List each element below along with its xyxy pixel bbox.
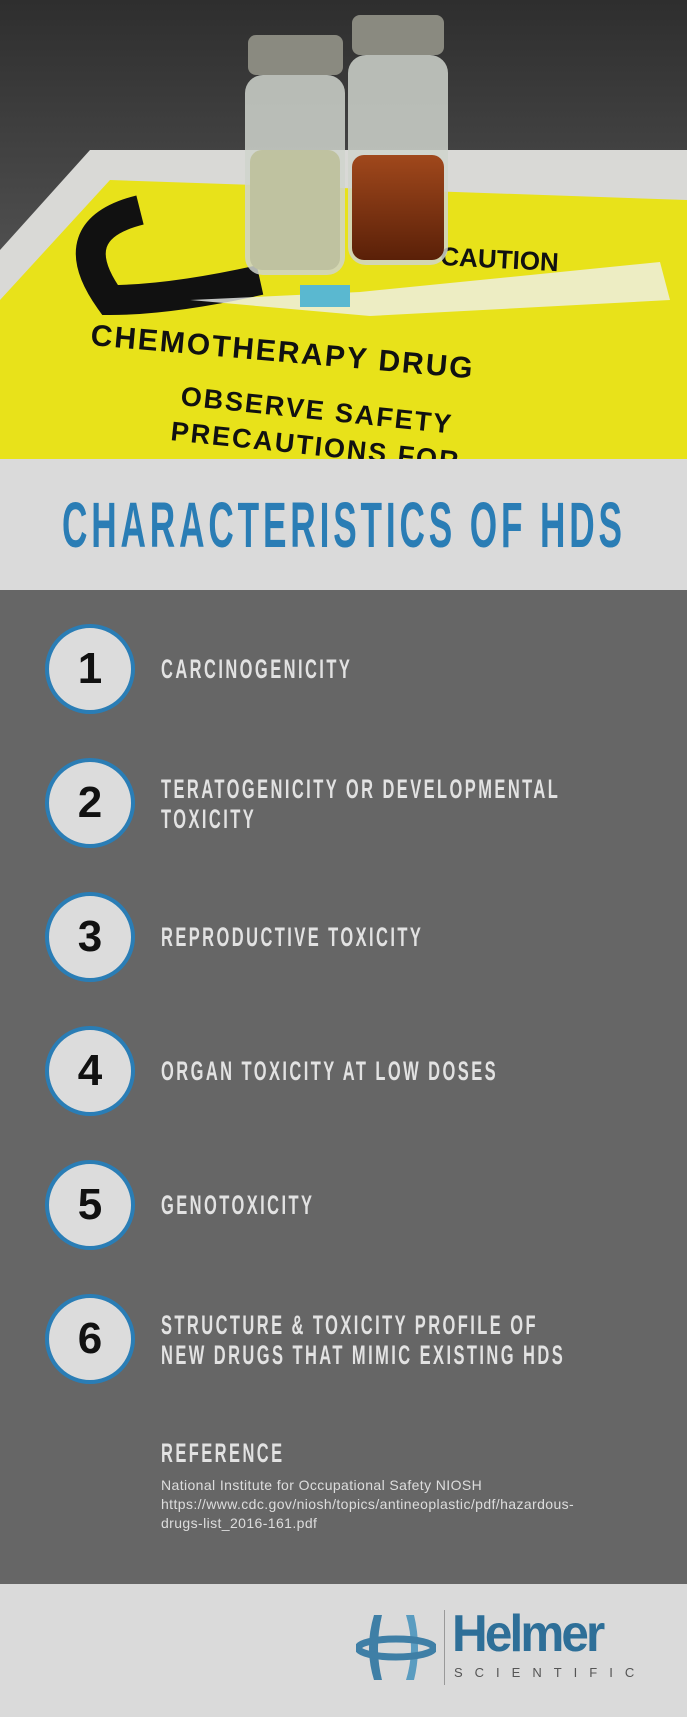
item 3: 3 <box>78 912 102 961</box>
reference block <box>161 1438 574 1531</box>
item 3: REPRODUCTIVE TOXICITY <box>161 922 423 952</box>
logo: Helmer Scientific: Helmer <box>452 1605 602 1663</box>
item 2: TOXICITY <box>161 804 256 834</box>
item 4 <box>45 1026 498 1116</box>
item 4: ORGAN TOXICITY AT LOW DOSES <box>161 1056 498 1086</box>
photo: chemotherapy vials: CAUTION <box>440 241 560 277</box>
item 2: 2 <box>78 778 102 827</box>
item 4: 4 <box>78 1046 102 1095</box>
item 6: 6 <box>78 1314 102 1363</box>
photo: chemotherapy vials: CHEMOTHERAPY DRUG <box>89 319 476 386</box>
item 5 <box>45 1160 314 1250</box>
reference block: drugs-list_2016-161.pdf <box>161 1515 317 1531</box>
item 1: 1 <box>78 644 102 693</box>
reference block: https://www.cdc.gov/niosh/topics/antineoplastic/pdf/hazardous- <box>161 1496 574 1512</box>
reference block: REFERENCE <box>161 1438 285 1468</box>
item 6 <box>45 1294 565 1384</box>
item 5: GENOTOXICITY <box>161 1190 314 1220</box>
logo: Helmer Scientific <box>356 1605 646 1685</box>
logo: Helmer Scientific: SCIENTIFIC <box>454 1665 646 1680</box>
item 2 <box>45 758 560 848</box>
reference block: National Institute for Occupational Safety NIOSH <box>161 1477 482 1493</box>
item 1: CARCINOGENICITY <box>161 654 352 684</box>
title band <box>0 459 687 590</box>
vial left <box>248 35 343 75</box>
photo: chemotherapy vials <box>0 0 687 459</box>
syringe <box>190 262 670 316</box>
item 3 <box>45 892 423 982</box>
footer <box>0 1584 687 1717</box>
title: CHARACTERISTICS OF HDS <box>62 489 626 561</box>
item 6: STRUCTURE & TOXICITY PROFILE OF <box>161 1310 538 1340</box>
item 1 <box>45 624 352 714</box>
item 5: 5 <box>78 1180 102 1229</box>
item 6: NEW DRUGS THAT MIMIC EXISTING HDS <box>161 1340 565 1370</box>
vial right <box>352 15 444 55</box>
item 2: TERATOGENICITY OR DEVELOPMENTAL <box>161 774 560 804</box>
photo: chemotherapy vials: OBSERVE SAFETY <box>179 381 455 440</box>
